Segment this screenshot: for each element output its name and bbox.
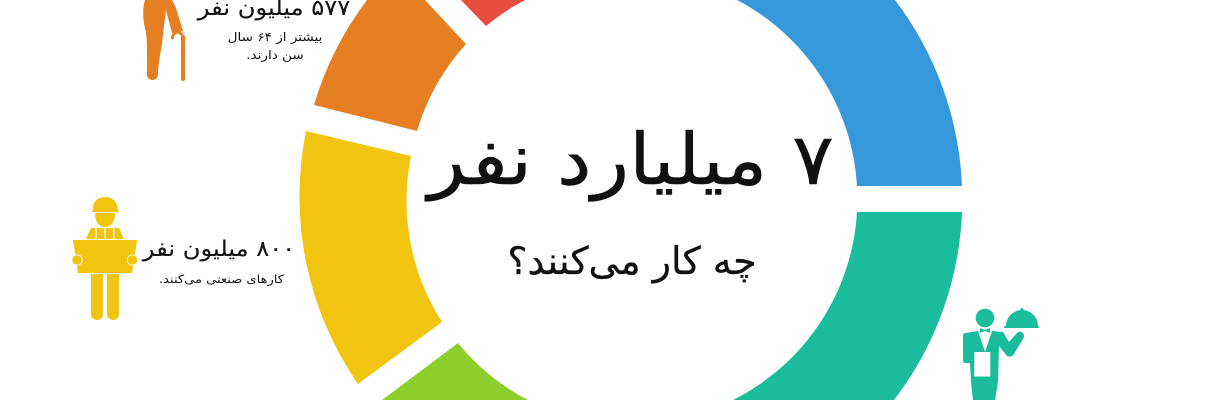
donut segment: yellow	[299, 131, 442, 384]
industry description: کارهای صنعتی می‌کنند.	[159, 273, 284, 287]
text block: elderly	[197, 0, 350, 63]
donut segment: teal	[733, 212, 962, 400]
icon: elderly person with cane	[143, 0, 183, 80]
subtitle: چه کار می‌کنند؟	[507, 239, 757, 283]
industry heading: ۸۰۰ میلیون نفر	[142, 237, 295, 262]
donut segment: orange	[314, 0, 466, 131]
elderly description line 2: سن دارند.	[246, 49, 304, 63]
donut segment: red	[461, 0, 525, 26]
title: ۷ میلیارد نفر	[424, 118, 834, 201]
donut segment: blue	[737, 0, 962, 186]
icon: waiter with cloche	[963, 308, 1039, 400]
elderly description line 1: بیشتر از ۶۴ سال	[228, 31, 322, 45]
donut segment: green	[382, 343, 528, 400]
icon: construction worker with plan	[72, 197, 138, 320]
text block: industry workers	[142, 237, 295, 287]
